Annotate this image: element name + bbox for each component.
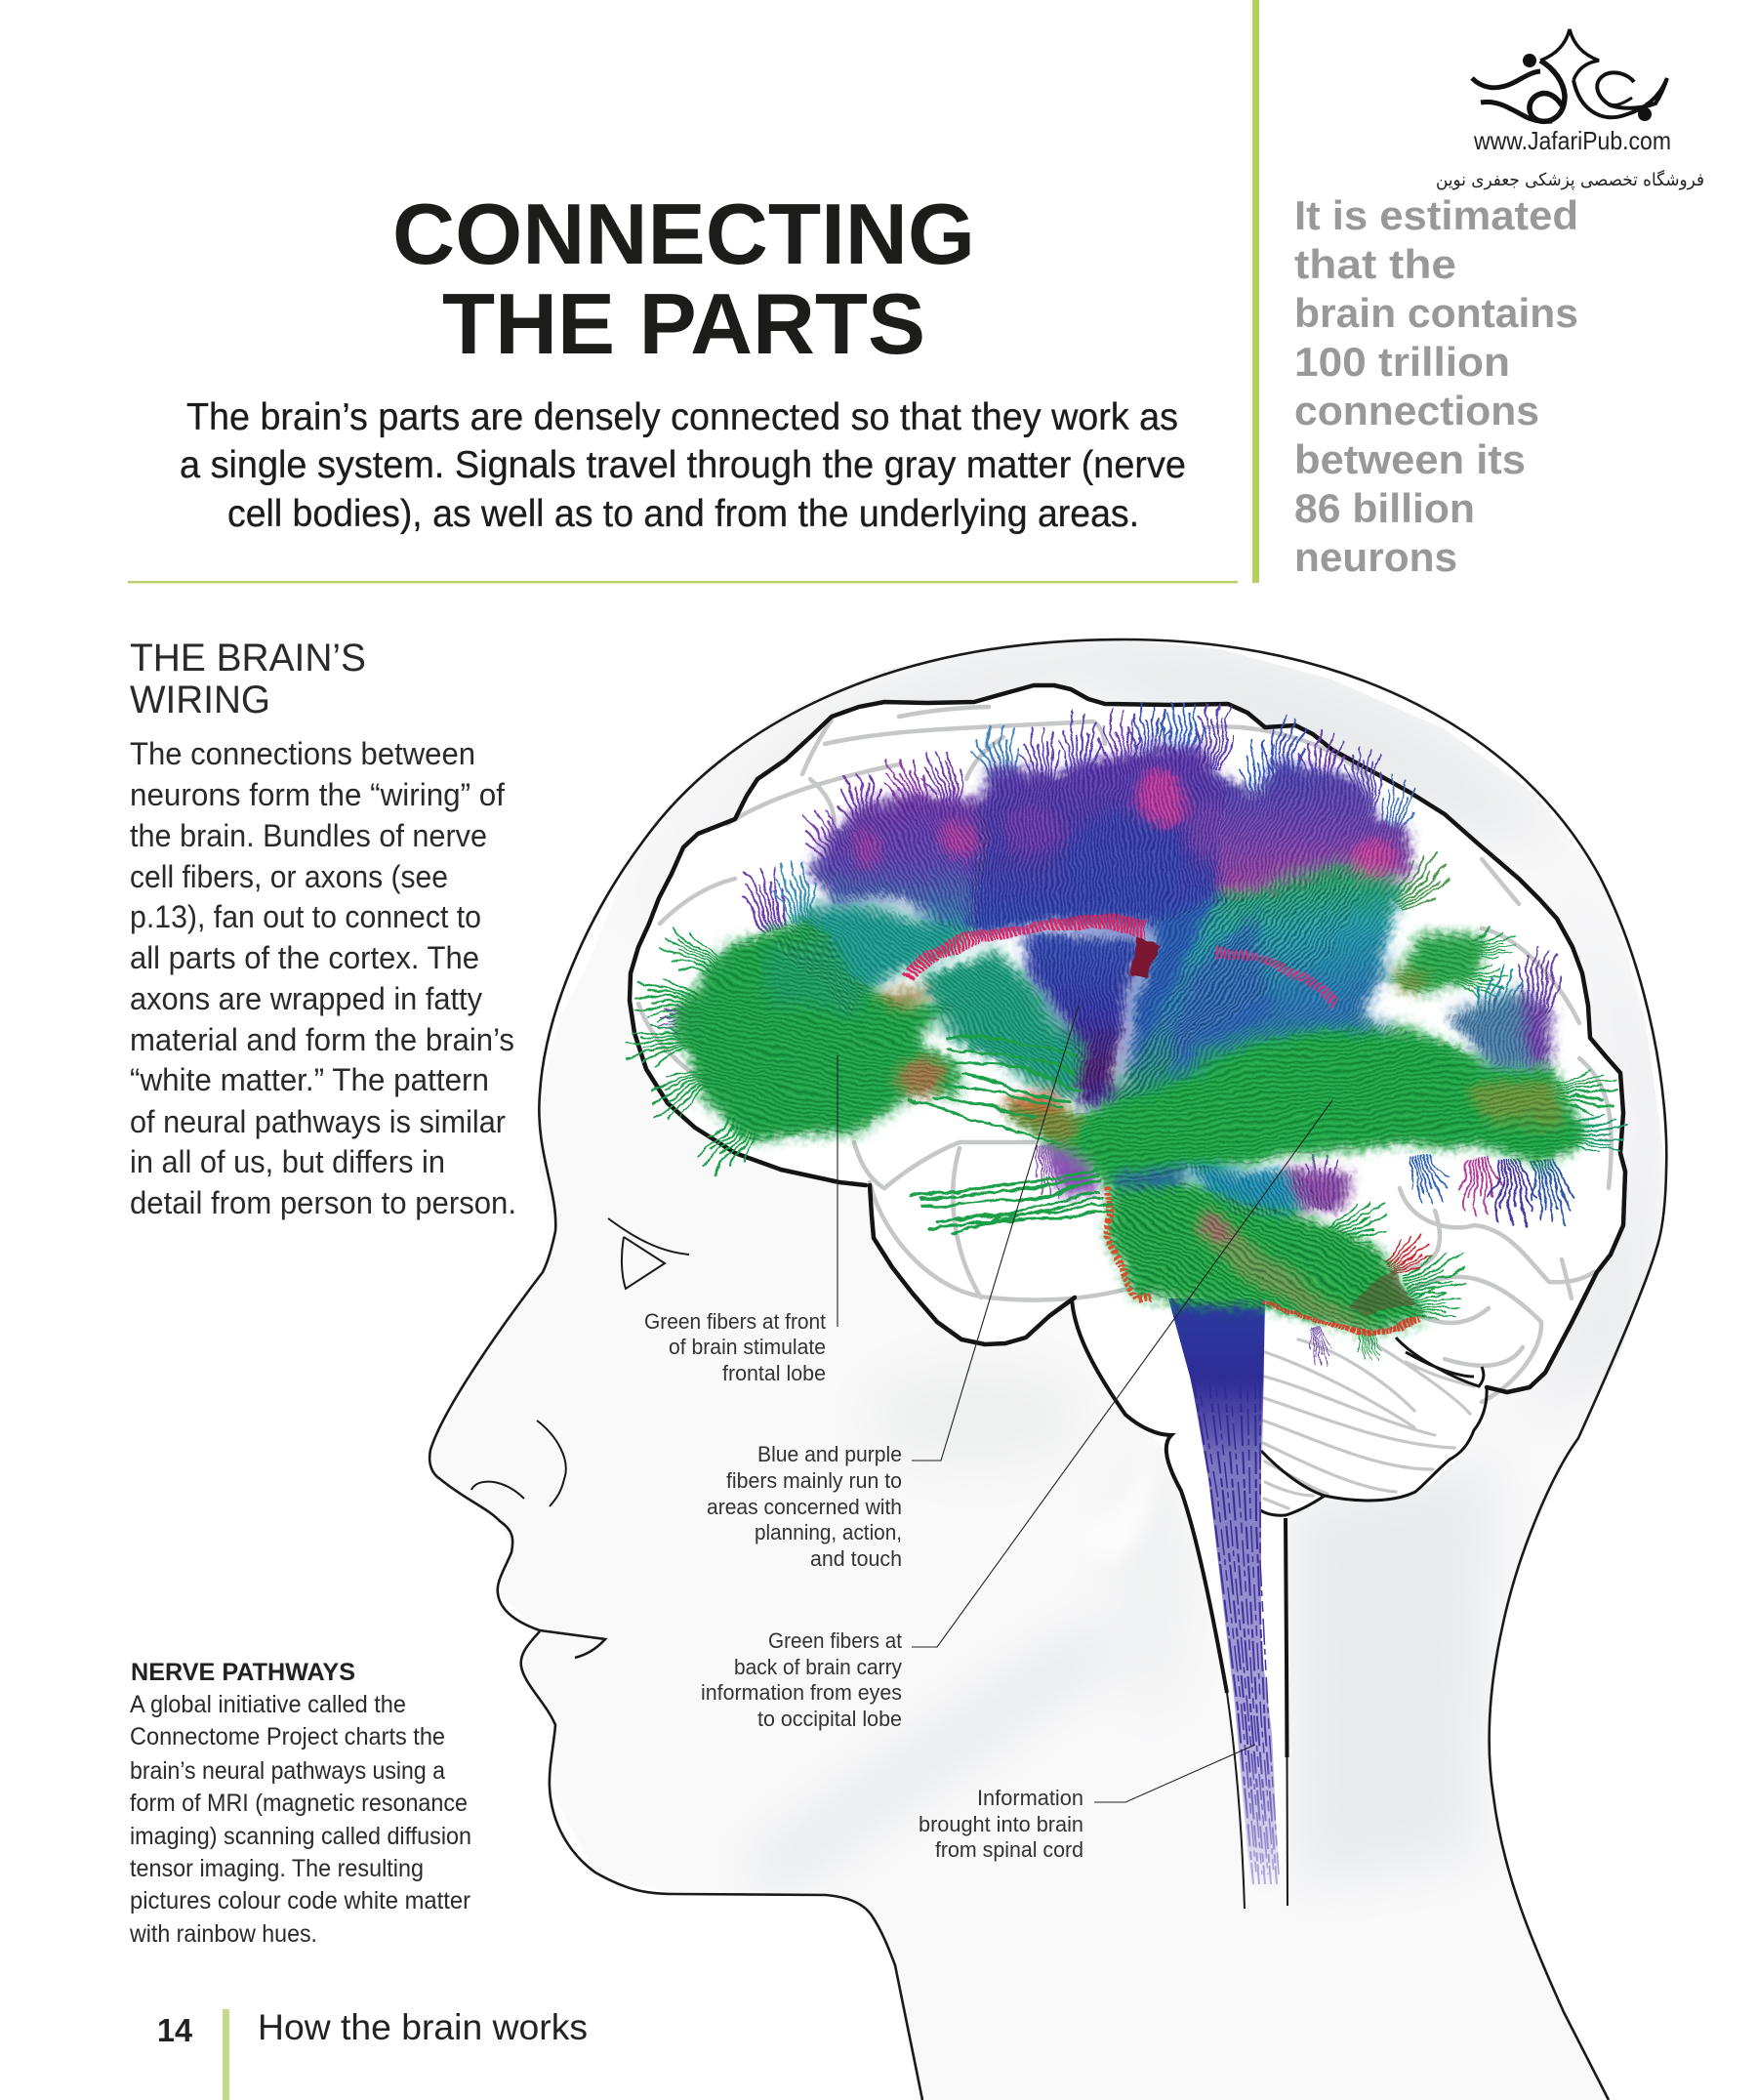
intro text: [180, 396, 1186, 535]
wiring body text: [130, 736, 516, 1220]
spinal cord fibers: [1168, 1298, 1280, 1894]
intro text: The brain’s parts are densely connected so that they work as: [186, 396, 1178, 438]
green gap strands: [908, 1032, 1113, 1232]
wiring body text: cell fibers, or axons (see: [130, 859, 448, 894]
section heading: THE BRAIN’S: [130, 637, 366, 679]
cord strands set one: [1193, 1377, 1277, 1884]
logo website text: www.JafariPub.com: [1473, 126, 1671, 155]
wiring body text: p.13), fan out to connect to: [130, 899, 481, 934]
publisher logo: [1472, 29, 1667, 121]
leader line: blue and purple fibers: [912, 1006, 1079, 1461]
side fact in gray: neurons: [1294, 534, 1457, 580]
callout: back green fibers: information from eyes: [701, 1680, 902, 1705]
fiber streak textures: [675, 742, 1590, 1332]
vertical green rule: [1252, 0, 1259, 583]
cerebral fold lines: [638, 707, 1612, 1402]
spinal cord lower line: [1227, 1693, 1245, 1909]
title: CONNECTING: [392, 185, 975, 282]
footer green bar: [223, 2009, 229, 2100]
nerve pathways body text: with rainbow hues.: [129, 1920, 317, 1948]
head shading: [766, 640, 1646, 1881]
callout: blue and purple fibers: areas concerned with: [707, 1495, 902, 1519]
side fact in gray: brain contains: [1294, 290, 1578, 336]
callout: blue and purple fibers: and touch: [810, 1546, 902, 1571]
callout: front green fibers: [644, 1309, 826, 1385]
side fact in gray: It is estimated: [1294, 192, 1578, 238]
side fact in gray: 86 billion: [1294, 485, 1475, 531]
side fact in gray: between its: [1294, 436, 1526, 482]
eye: [608, 1218, 689, 1289]
callout: front green fibers: Green fibers at front: [644, 1309, 826, 1334]
callout: back green fibers: to occipital lobe: [757, 1707, 902, 1731]
leader line: back green fibers: [912, 1100, 1332, 1647]
face profile: [429, 1231, 922, 2100]
long strands: [908, 1032, 1113, 1232]
side fact in gray: 100 trillion: [1294, 339, 1510, 385]
side fact in gray: that the: [1294, 241, 1456, 287]
nerve pathways body text: [129, 1691, 471, 1948]
cerebellum folds: [1263, 1339, 1474, 1508]
brainstem outline: [1072, 1298, 1227, 1693]
callosum arcs: [907, 923, 1146, 978]
nerve pathways body text: tensor imaging. The resulting: [130, 1855, 424, 1882]
cord strands set two: [1201, 1367, 1279, 1874]
callout: spinal cord: brought into brain: [919, 1812, 1083, 1836]
nerve pathways body text: A global initiative called the: [130, 1691, 406, 1718]
cerebellar red edges: [1109, 1188, 1152, 1298]
logo persian text: فروشگاه تخصصی پزشکی جعفری نوین: [1436, 169, 1704, 190]
brain white fill: [631, 685, 1625, 1515]
nose details: [471, 1421, 566, 1506]
neck bone line: [1286, 1518, 1287, 1757]
callout: back green fibers: Green fibers at: [768, 1628, 902, 1653]
page number: 14: [157, 2012, 193, 2048]
neck bone lower line: [1287, 1757, 1288, 1906]
callout: blue and purple fibers: [707, 1442, 902, 1571]
cerebellum outline: [1257, 1338, 1487, 1515]
head fill: [430, 639, 1666, 2100]
brain underside outline: [870, 1185, 1075, 1344]
callout: front green fibers: frontal lobe: [722, 1361, 826, 1385]
nerve pathways body text: imaging) scanning called diffusion: [130, 1823, 471, 1850]
side fact in gray: [1294, 192, 1578, 580]
nerve pathways heading: NERVE PATHWAYS: [131, 1659, 355, 1686]
diffusion tensor fibers: [626, 701, 1628, 1368]
callout: blue and purple fibers: Blue and purple: [757, 1442, 902, 1466]
wiring body text: The connections between: [130, 736, 475, 771]
footer section name: How the brain works: [258, 2007, 588, 2047]
wiring body text: all parts of the cortex. The: [130, 940, 479, 975]
callout: back green fibers: [701, 1628, 902, 1731]
wiring body text: of neural pathways is similar: [130, 1104, 506, 1139]
leader line: spinal cord: [1094, 1745, 1255, 1802]
spinal canal fill: [1165, 1445, 1287, 1912]
ear shading: [1064, 1435, 1152, 1562]
nerve pathways body text: pictures colour code white matter: [130, 1887, 470, 1915]
head outline back: [539, 639, 1666, 2100]
wiring body text: detail from person to person.: [130, 1185, 516, 1220]
brain outline: [630, 685, 1625, 1392]
section heading: [130, 637, 366, 721]
nerve pathways body text: brain’s neural pathways using a: [130, 1757, 445, 1785]
horizontal green rule: [128, 581, 1238, 584]
wiring body text: axons are wrapped in fatty: [130, 981, 482, 1016]
callout: blue and purple fibers: planning, action,: [755, 1520, 902, 1544]
callout: blue and purple fibers: fibers mainly run to: [726, 1468, 902, 1493]
cord base: [1176, 1308, 1280, 1894]
head illustration: [429, 635, 1669, 2100]
fringe tufts: [626, 701, 1628, 1368]
callout: spinal cord: [919, 1786, 1083, 1862]
title: [392, 185, 975, 372]
intro text: a single system. Signals travel through the gray matter (nerve: [180, 444, 1186, 486]
callout: spinal cord: Information: [977, 1786, 1083, 1810]
fiber colour masses: [675, 742, 1590, 1332]
nerve pathways body text: form of MRI (magnetic resonance: [130, 1790, 468, 1817]
wiring body text: “white matter.” The pattern: [130, 1062, 489, 1097]
nerve pathways body text: Connectome Project charts the: [130, 1723, 445, 1750]
leader line: front green fibers: [837, 1055, 838, 1327]
title: THE PARTS: [442, 275, 925, 372]
side fact in gray: connections: [1294, 388, 1539, 433]
cord dark top: [1168, 1298, 1265, 1464]
wiring body text: in all of us, but differs in: [130, 1144, 445, 1179]
callout: spinal cord: from spinal cord: [935, 1837, 1083, 1862]
intro text: cell bodies), as well as to and from the underlying areas.: [227, 493, 1139, 535]
section heading: WIRING: [130, 679, 270, 721]
wiring body text: material and form the brain’s: [130, 1022, 514, 1057]
callout: front green fibers: of brain stimulate: [669, 1335, 826, 1359]
callout: back green fibers: back of brain carry: [734, 1655, 902, 1679]
wiring body text: the brain. Bundles of nerve: [130, 818, 487, 853]
brain illustration: [630, 685, 1625, 1912]
wiring body text: neurons form the “wiring” of: [130, 777, 505, 812]
